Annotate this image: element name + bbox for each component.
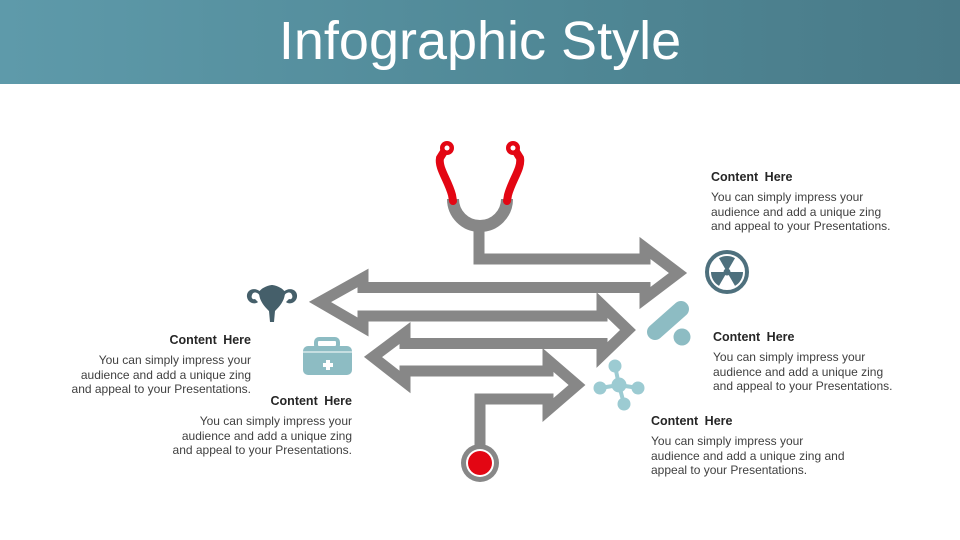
icon: pill	[655, 309, 690, 346]
title: Infographic Style	[279, 11, 681, 71]
icon: uterus	[247, 285, 297, 322]
text block: lower left: and appeal to your Presentations.	[173, 443, 352, 457]
header band	[0, 0, 960, 84]
text block: lower left	[173, 394, 352, 457]
text block: top right: and appeal to your Presentations.	[711, 219, 890, 233]
text block: left: audience and add a unique zing	[81, 368, 251, 382]
text block: middle right	[713, 330, 892, 393]
text block: left	[72, 333, 251, 396]
text block: lower left: Content Here	[271, 394, 352, 408]
icon: medical kit	[303, 339, 352, 375]
text block: left: Content Here	[170, 333, 251, 347]
chest piece	[461, 444, 499, 482]
text block: lower left: You can simply impress your	[200, 414, 352, 428]
text block: middle right: Content Here	[713, 330, 794, 344]
text block: lower right	[651, 414, 844, 477]
text block: lower right: Content Here	[651, 414, 732, 428]
text block: middle right: You can simply impress your	[713, 350, 865, 364]
arrows snake	[320, 228, 678, 446]
text block: lower right: You can simply impress your	[651, 434, 803, 448]
text block: middle right: audience and add a unique zing	[713, 365, 883, 379]
icon: radiation	[707, 252, 747, 292]
text block: lower right: audience and add a unique zing and	[651, 449, 844, 463]
text block: middle right: and appeal to your Presentations.	[713, 379, 892, 393]
stethoscope	[440, 141, 520, 226]
text block: lower left: audience and add a unique zing	[182, 429, 352, 443]
text block: top right	[711, 170, 890, 233]
text block: top right: audience and add a unique zing	[711, 205, 881, 219]
icon: molecule	[594, 360, 644, 410]
text block: left: You can simply impress your	[99, 353, 251, 367]
text block: top right: Content Here	[711, 170, 792, 184]
text block: top right: You can simply impress your	[711, 190, 863, 204]
text block: lower right: appeal to your Presentations.	[651, 463, 807, 477]
text block: left: and appeal to your Presentations.	[72, 382, 251, 396]
